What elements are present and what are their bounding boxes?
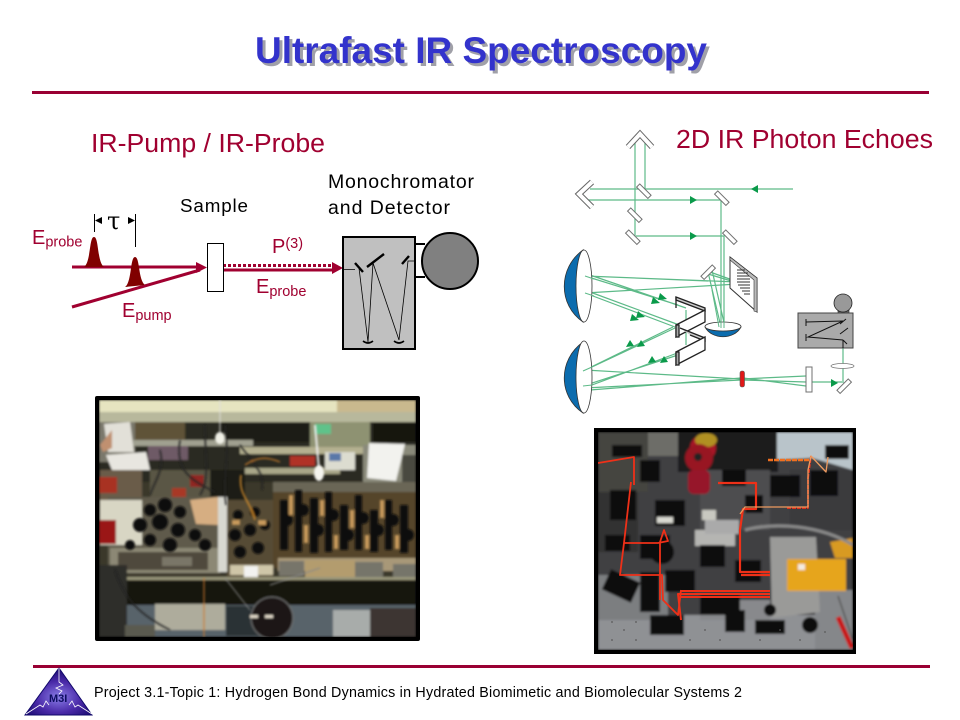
label: Monochromator and Detector: [328, 171, 474, 219]
parabolic mirrors: [564, 250, 741, 413]
heading: 2D IR Photon Echoes: 2D IR Photon Echoes: [676, 126, 933, 154]
diagram: 2D IR photon echo setup: [564, 134, 854, 413]
beams on mirrors: [583, 276, 724, 386]
label: Monochromator and Detector: and Detector: [328, 197, 450, 219]
photo: 2D IR optical table with red beam paths: [594, 428, 856, 654]
detector assembly: [798, 294, 853, 348]
diagram: IR pump-probe setup: [32, 171, 478, 349]
logo: M3I: [25, 668, 92, 715]
fold mirrors: [676, 297, 705, 365]
green beam paths: [583, 143, 843, 390]
title: Ultrafast IR Spectroscopy: [255, 30, 707, 71]
label: E probe: E: [32, 227, 45, 249]
logo: M3I: M3I: [49, 693, 67, 705]
sample: [208, 244, 224, 292]
monochromator: [343, 237, 415, 349]
footer text: Project 3.1-Topic 1: Hydrogen Bond Dynamics in Hydrated Biomimetic and Biomolecular Systems 2: [94, 685, 742, 701]
label: E pump: E: [122, 300, 135, 322]
beams: [72, 262, 343, 307]
delay tau marker: [94, 207, 136, 247]
label: P(3): P: [272, 236, 285, 258]
photo: pump-probe laser table: [95, 396, 420, 641]
pulses: [84, 237, 145, 287]
label: E pump: pump: [135, 308, 172, 324]
sample cell: [740, 371, 744, 387]
label: Sample: Sample: [180, 195, 248, 216]
title: Ultrafast IR Spectroscopy: [258, 33, 710, 74]
flat mirrors: [626, 184, 851, 393]
detector: [415, 233, 478, 289]
delay tau marker: τ: [107, 207, 120, 235]
grating: [730, 257, 757, 312]
beam arrows: [626, 185, 838, 387]
retroreflectors: [579, 134, 652, 207]
label: Monochromator and Detector: Monochromator: [328, 171, 474, 193]
label: E probe: probe: [45, 234, 82, 250]
heading: IR-Pump / IR-Probe: IR-Pump / IR-Probe: [91, 130, 325, 158]
lens: [831, 364, 854, 368]
label: E probe output: E: [256, 276, 269, 298]
label: E probe output: probe: [269, 284, 306, 300]
label: P(3): (3): [285, 236, 303, 252]
